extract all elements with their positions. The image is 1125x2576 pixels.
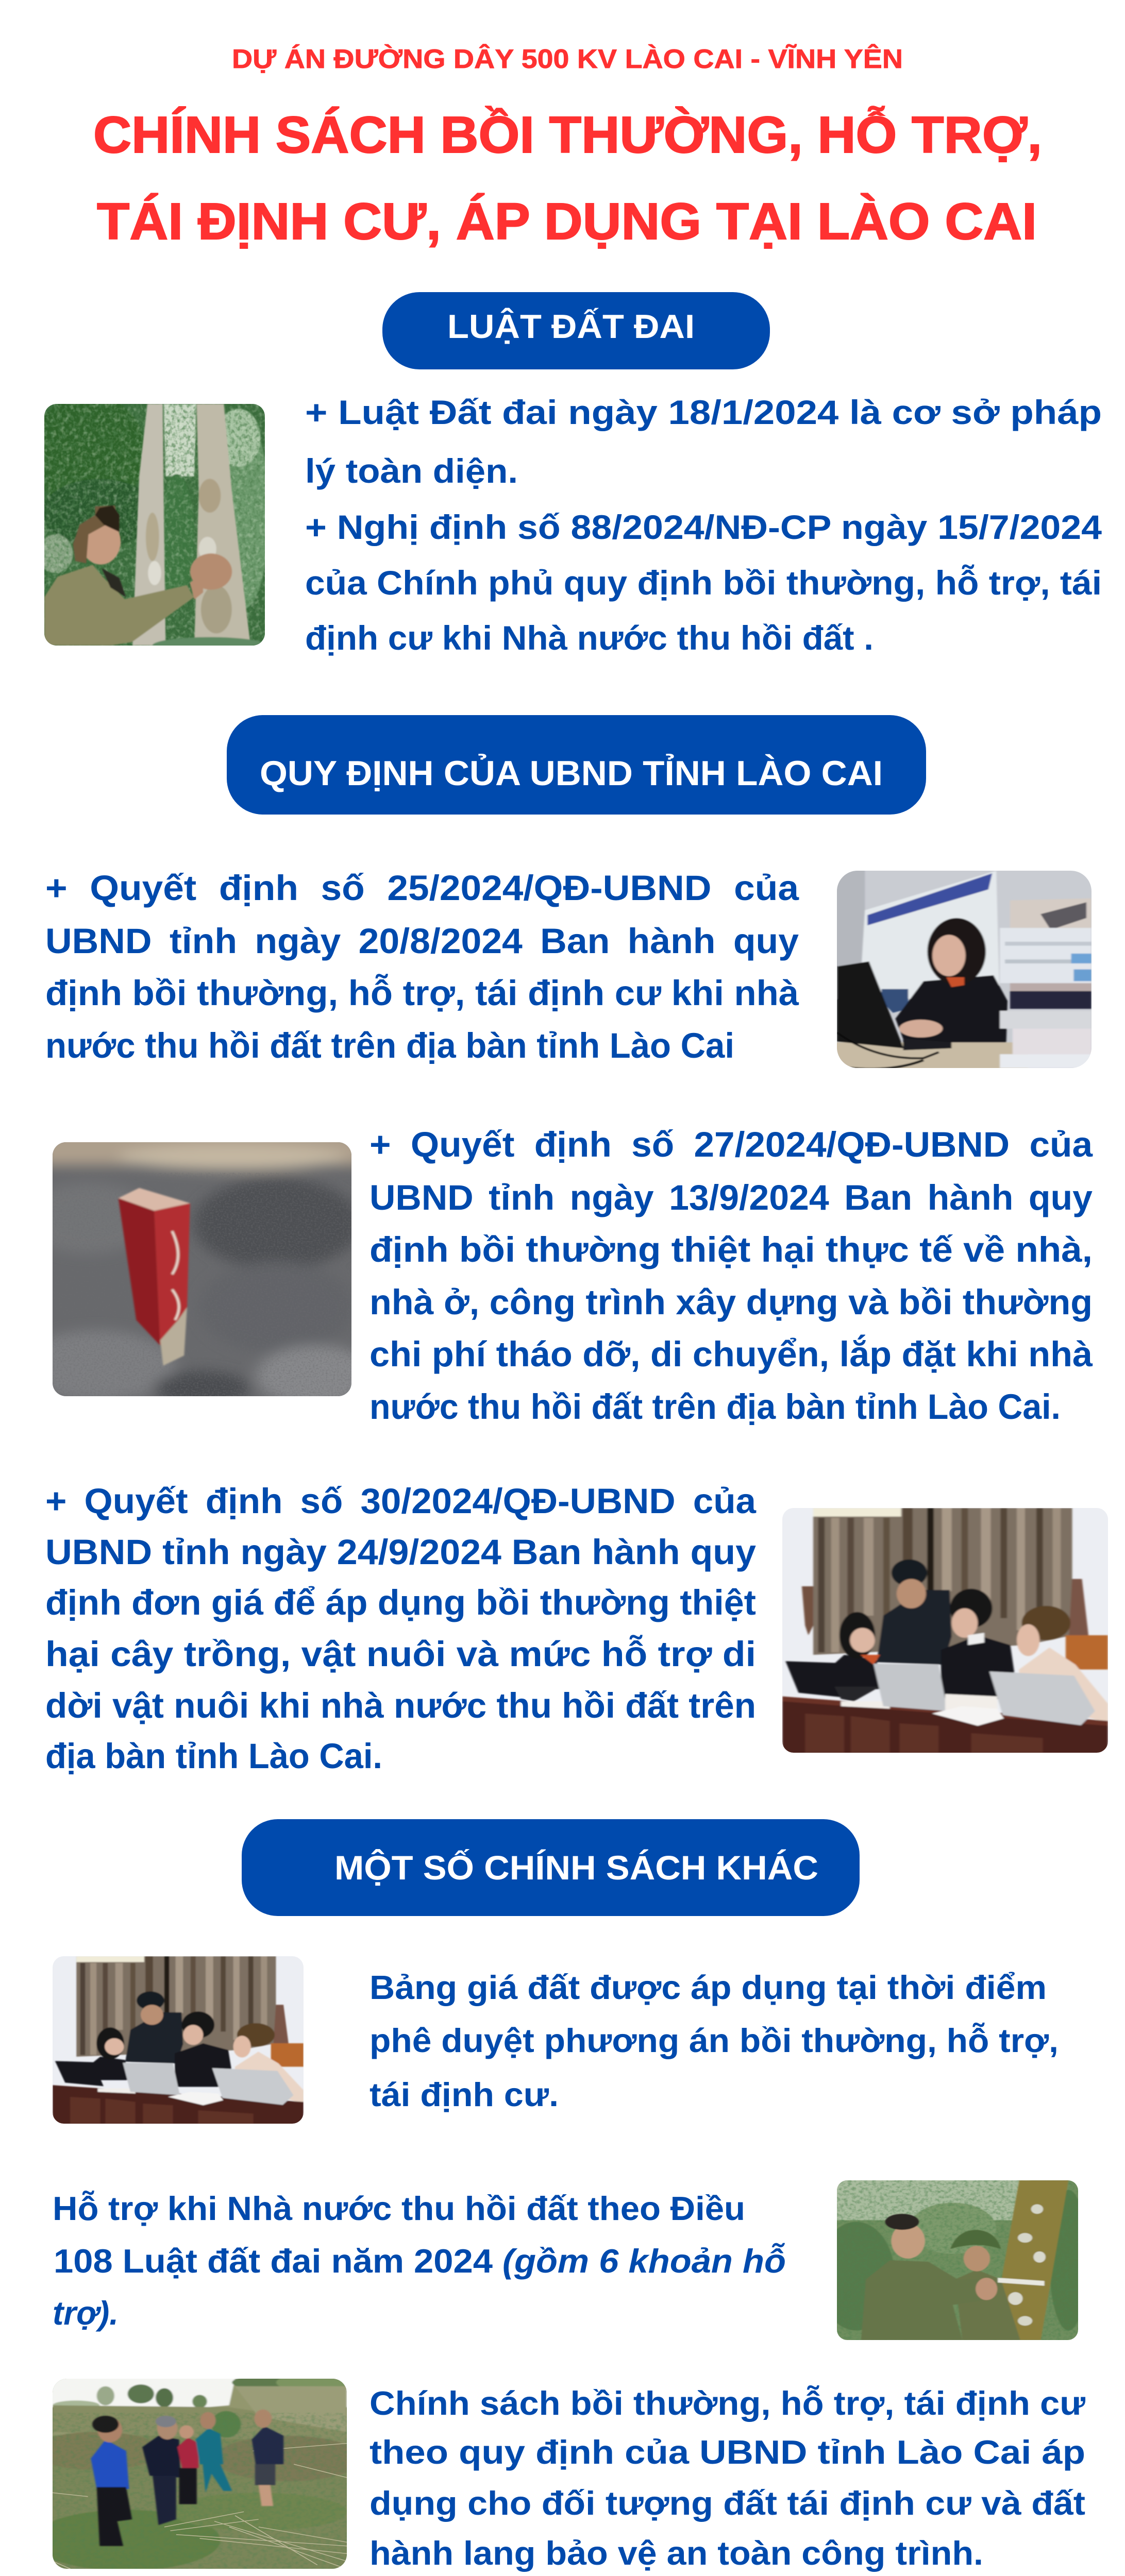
text: decision 25: + Quyết định số 25/2024/QĐ-UBND của: [45, 868, 799, 908]
text: resettlement policy: theo quy định của UBND tỉnh Lào Cai áp: [370, 2433, 1085, 2471]
text: land price: [370, 1969, 1059, 2113]
text: article 108 support: [53, 2190, 786, 2332]
text: resettlement policy: dụng cho đối tượng đất tái định cư và đất: [370, 2484, 1085, 2522]
text: land law: định cư khi Nhà nước thu hồi đất .: [305, 619, 874, 657]
heading: other policies: [242, 1819, 860, 1916]
text: article 108 support: trợ).: [53, 2294, 119, 2332]
text: land law: lý toàn diện.: [305, 452, 518, 490]
text: land price: tái định cư.: [370, 2076, 559, 2113]
text: decision 30: định đơn giá để áp dụng bồi thường thiệt: [45, 1583, 756, 1622]
text: decision 30: địa bàn tỉnh Lào Cai.: [45, 1736, 382, 1776]
text: decision 30: UBND tỉnh ngày 24/9/2024 Ban hành quy: [45, 1532, 756, 1572]
subtitle: DỰ ÁN ĐƯỜNG DÂY 500 KV LÀO CAI - VĨNH YÊN: [232, 44, 903, 74]
text: decision 30: + Quyết định số 30/2024/QĐ-UBND của: [45, 1481, 757, 1521]
text: decision 30: dời vật nuôi khi nhà nước thu hồi đất trên: [45, 1686, 756, 1725]
text: decision 30: hại cây trồng, vật nuôi và mức hỗ trợ di: [45, 1634, 756, 1674]
heading: provincial rules: [227, 715, 926, 815]
text: land law: + Nghị định số 88/2024/NĐ-CP ngày 15/7/2024: [305, 508, 1102, 546]
heading: Luật đất đai: [382, 292, 770, 369]
text: decision 27: định bồi thường thiệt hại thực tế về nhà,: [370, 1230, 1093, 1269]
text: decision 27: chi phí tháo dỡ, di chuyển, lắp đặt khi nhà: [370, 1334, 1093, 1374]
text: article 108 support: Hỗ trợ khi Nhà nước thu hồi đất theo Điều: [53, 2190, 745, 2227]
text: decision 27: + Quyết định số 27/2024/QĐ-UBND của: [370, 1125, 1093, 1164]
text: land law: [305, 393, 1102, 657]
photo: group in cleared field: [53, 2379, 347, 2569]
text: decision 25: định bồi thường, hỗ trợ, tái định cư khi nhà: [45, 973, 799, 1013]
title: CHÍNH SÁCH BỒI THƯỜNG, HỖ TRỢ,: [93, 106, 1042, 164]
photo: team at laptops: [782, 1508, 1108, 1753]
photo: two men measuring tree: [837, 2180, 1078, 2340]
text: decision 30: [45, 1481, 757, 1776]
text: decision 27: nhà ở, công trình xây dựng và bồi thường: [370, 1282, 1093, 1322]
text: decision 25: UBND tỉnh ngày 20/8/2024 Ban hành quy: [45, 921, 799, 961]
heading: Luật đất đai: LUẬT ĐẤT ĐAI: [447, 308, 695, 345]
text: decision 25: [45, 868, 799, 1065]
text: decision 27: [370, 1125, 1093, 1427]
text: resettlement policy: [370, 2384, 1086, 2572]
text: decision 27: nước thu hồi đất trên địa bàn tỉnh Lào Cai.: [370, 1387, 1061, 1427]
photo: team at laptops, small: [53, 1956, 304, 2124]
text: land price: phê duyệt phương án bồi thường, hỗ trợ,: [370, 2022, 1059, 2059]
text: resettlement policy: Chính sách bồi thường, hỗ trợ, tái định cư: [370, 2384, 1086, 2422]
text: decision 25: nước thu hồi đất trên địa bàn tỉnh Lào Cai: [45, 1026, 734, 1065]
photo: red survey stake: [53, 1142, 351, 1396]
heading: provincial rules: QUY ĐỊNH CỦA UBND TỈNH LÀO CAI: [260, 753, 883, 793]
text: land law: của Chính phủ quy định bồi thường, hỗ trợ, tái: [305, 564, 1102, 602]
heading: other policies: MỘT SỐ CHÍNH SÁCH KHÁC: [334, 1849, 818, 1887]
text: article 108 support: 108 Luật đất đai năm 2024 (gồm 6 khoản hỗ: [54, 2242, 786, 2280]
photo: woman at laptop with file stack: [837, 871, 1092, 1068]
photo: man touching forest tree: [44, 404, 265, 646]
title: [93, 106, 1042, 250]
text: resettlement policy: hành lang bảo vệ an toàn công trình.: [370, 2534, 983, 2572]
title: TÁI ĐỊNH CƯ, ÁP DỤNG TẠI LÀO CAI: [97, 193, 1037, 250]
text: land law: + Luật Đất đai ngày 18/1/2024 là cơ sở pháp: [305, 393, 1102, 431]
text: decision 27: UBND tỉnh ngày 13/9/2024 Ban hành quy: [370, 1178, 1093, 1217]
text: land price: Bảng giá đất được áp dụng tại thời điểm: [370, 1969, 1047, 2006]
